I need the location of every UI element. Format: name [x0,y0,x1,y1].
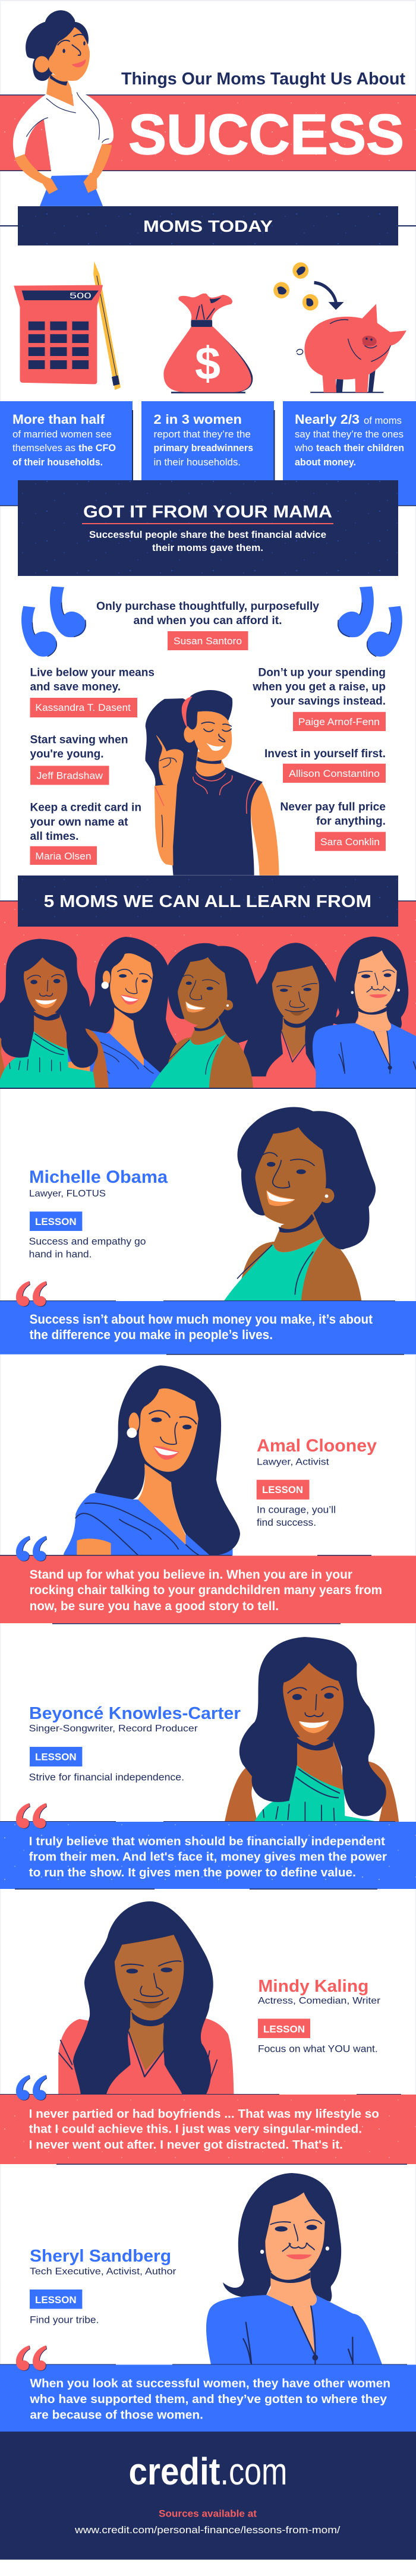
stat card: teach children: say that they’re the ones [295,429,404,440]
icon: money bag [163,294,253,393]
icon: calculator and pencil: 500 [70,291,92,300]
heading: success: SUCCESS [128,103,404,166]
stat card: cfo [0,401,133,506]
profile: michelle obama [29,1167,168,1260]
profile: beyonce knowles-carter [29,1704,241,1783]
quote band: beyonce knowles-carter: from their men. And let's face it, money gives men the power [29,1850,387,1864]
profile: beyonce knowles-carter: Strive for financial independence. [29,1771,184,1783]
quote: paige arnof-fenn [252,667,386,731]
profile: beyonce knowles-carter: LESSON [35,1752,77,1763]
stat card: teach children: who [294,442,313,454]
illustration: woman pointing [145,690,279,876]
stat card: breadwinners: report that they’re the [153,429,251,440]
stat card: teach children: Nearly 2/3 [295,412,360,427]
icon: blue quote mark [16,1536,47,1561]
profile: mindy kaling: LESSON [263,2023,305,2035]
quote band: michelle obama: Success isn’t about how much money you make, it’s about [30,1312,373,1327]
icon: red quote mark [16,1803,47,1829]
profile: michelle obama: Michelle Obama [29,1167,168,1187]
quote: susan santoro: Only purchase thoughtfully, purposefully [96,600,319,613]
profile: mindy kaling: Focus on what YOU want. [258,2043,378,2055]
quote band: mindy kaling: I never partied or had boyfriends ... That was my lifestyle so [29,2107,379,2121]
profile: sheryl sandberg [30,2247,177,2325]
stat card: teach children: of moms [364,415,402,426]
quote: kassandra t. dasent: and save money. [30,681,121,694]
quote band: sheryl sandberg: who have supported them, and they’ve gotten to where they [29,2392,387,2406]
quote: sara conklin: for anything. [316,815,386,827]
stat card: breadwinners: in their households. [153,456,241,468]
quote: kassandra t. dasent [30,667,155,717]
quote: paige arnof-fenn: Don’t up your spending [258,667,386,679]
section header: got it from your mama: Successful people share the best financial advice [89,529,326,540]
quote band: sheryl sandberg [0,2364,416,2432]
portrait: mindy kaling [58,1901,234,2156]
profile: amal clooney: LESSON [262,1484,303,1495]
section header: got it from your mama [18,480,398,576]
profile: mindy kaling [258,1977,381,2055]
quote: allison constantino: Invest in yourself first. [264,748,386,760]
stat card: cfo: of their households. [12,456,103,468]
quote: kassandra t. dasent: Live below your means [30,667,155,679]
logo: credit.com: credit [128,2450,220,2493]
profile: beyonce knowles-carter: Beyoncé Knowles-Carter [29,1704,241,1723]
footer [0,2432,416,2559]
stat card: teach children: teach their children [316,442,404,454]
panel: stat cards [0,401,416,506]
quote band: mindy kaling [0,2094,416,2165]
quote: sara conklin: Sara Conklin [320,836,380,848]
red banner [0,95,416,171]
icon: red quote mark [16,1281,47,1306]
quote: paige arnof-fenn: your savings instead. [270,695,386,708]
quote: maria olsen: your own name at [30,816,128,829]
quote: jeff bradshaw: Jeff Bradshaw [37,770,103,782]
portrait: beyonce knowles-carter [219,1637,402,1859]
portrait: sheryl sandberg [206,2173,393,2440]
section header: moms today [0,206,416,245]
icon: blue quote marks right [338,587,402,657]
quote: paige arnof-fenn: when you get a raise, up [252,681,386,694]
quote band: sheryl sandberg: are because of those women. [30,2408,203,2421]
stat card: cfo: the CFO [78,442,116,454]
quote band: mindy kaling: I never went out after. I never got distracted. That's it. [29,2138,343,2152]
profile: michelle obama: Lawyer, FLOTUS [29,1189,106,1199]
stat card: breadwinners: 2 in 3 women [153,412,242,427]
quote: susan santoro [96,600,319,650]
profile: amal clooney: find success. [257,1517,316,1528]
section header: got it from your mama: their moms gave them. [152,542,263,553]
quote band: sheryl sandberg: When you look at successful women, they have other women [30,2376,390,2391]
quote band: mindy kaling: that I could achieve this. I just was very singular-minded. [29,2122,362,2136]
portrait: amal clooney [64,1365,240,1583]
quote: allison constantino: Allison Constantino [289,768,380,779]
icon: piggy bank with coins [273,262,406,393]
profile: michelle obama: LESSON [35,1216,77,1227]
stat card: cfo: themselves as [12,442,75,454]
quote band: amal clooney [0,1555,416,1624]
profile: sheryl sandberg: Tech Executive, Activist, Author [30,2267,177,2276]
profile: michelle obama: hand in hand. [29,1249,92,1260]
quote: jeff bradshaw: Start saving when [30,733,128,747]
stat card: cfo: of married women see [12,429,112,440]
quote: maria olsen: Keep a credit card in [30,802,141,814]
stat card: teach children: about money. [295,456,356,468]
quote: jeff bradshaw: you're young. [30,748,103,761]
profile: beyonce knowles-carter: Singer-Songwriter, Record Producer [29,1724,198,1734]
quote: jeff bradshaw [30,733,128,785]
section header: 5 moms we can all learn from: 5 MOMS WE CAN ALL LEARN FROM [44,892,371,911]
profile: mindy kaling: Mindy Kaling [258,1977,368,1996]
stat card: teach children [283,401,416,506]
quote: susan santoro: and when you can afford it. [133,615,282,627]
profile: mindy kaling: Actress, Comedian, Writer [258,1996,381,2006]
sources label: Sources available at [159,2508,257,2519]
profile: amal clooney: In courage, you’ll [257,1504,336,1516]
quote band: michelle obama [0,1300,416,1355]
quote: maria olsen: all times. [30,830,78,843]
quote band: beyonce knowles-carter: to run the show. It gives men the power to define value. [29,1866,356,1879]
quote: maria olsen: Maria Olsen [35,851,92,862]
quote band: michelle obama: the difference you make in people’s lives. [30,1327,273,1342]
section header: 5 moms we can all learn from [18,876,398,927]
icon: red quote mark [16,2345,47,2371]
quote: sara conklin [280,801,386,851]
coral band behind portraits [0,900,416,1089]
icon: calculator and pencil [14,262,121,390]
icon: blue quote marks left [21,587,86,657]
stat card: breadwinners: primary breadwinners [153,442,253,454]
logo: credit.com [128,2450,288,2493]
quote: susan santoro: Susan Santoro [174,635,242,647]
icon: blue quote mark [16,2075,47,2101]
profile: amal clooney [257,1436,377,1528]
profile: amal clooney: Amal Clooney [257,1436,377,1456]
stat card: cfo: More than half [12,412,105,427]
section header: moms today: MOMS TODAY [143,217,273,235]
illustration: five moms group portrait [0,937,416,1088]
quote: allison constantino [264,748,386,783]
profile: sheryl sandberg: LESSON [35,2294,77,2306]
quote: paige arnof-fenn: Paige Arnof-Fenn [298,716,380,728]
profile: sheryl sandberg: Find your tribe. [30,2314,99,2325]
portrait: michelle obama [210,1107,376,1326]
quote band: amal clooney: Stand up for what you believe in. When you are in your [30,1568,352,1582]
quote band: beyonce knowles-carter: I truly believe that women should be financially independent [29,1835,385,1848]
logo: credit.com: .com [220,2450,288,2493]
quote band: beyonce knowles-carter [0,1821,416,1890]
quote band: amal clooney: rocking chair talking to your grandchildren many years from [30,1583,382,1597]
quote: sara conklin: Never pay full price [280,801,386,813]
quote: maria olsen [30,802,141,865]
icon: money bag: $ [195,337,220,389]
sources url: www.credit.com/personal-finance/lessons-from-mom/ [74,2524,341,2536]
section header: got it from your mama: GOT IT FROM YOUR MAMA [83,503,332,522]
title: things our moms taught us about: Things Our Moms Taught Us About [121,70,405,89]
quote band: amal clooney: now, be sure you have a good story to tell. [30,1599,279,1613]
profile: amal clooney: Lawyer, Activist [257,1457,329,1467]
illustration: hero woman [13,10,114,206]
profile: michelle obama: Success and empathy go [29,1236,146,1247]
quote: kassandra t. dasent: Kassandra T. Dasent [35,702,131,713]
stat card: breadwinners [141,401,275,482]
profile: sheryl sandberg: Sheryl Sandberg [30,2247,171,2266]
